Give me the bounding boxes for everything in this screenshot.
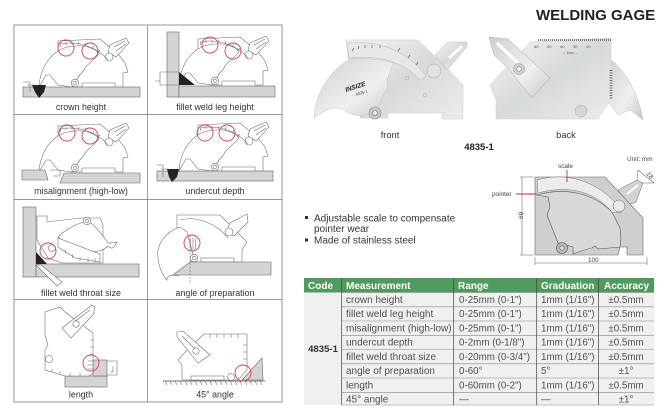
row: fillet weld leg height: fillet weld leg height — [346, 309, 433, 320]
label: front: front — [381, 130, 400, 140]
photo: gauge back — [489, 37, 643, 120]
row: 45 degree angle: — — [541, 394, 551, 406]
photo: gauge front: INSIZE — [344, 81, 367, 94]
photo: gauge front — [314, 40, 467, 119]
table header: Range — [458, 281, 489, 292]
panel: fillet weld leg height — [155, 32, 275, 112]
row: crown height: 1mm (1/16") — [541, 295, 595, 306]
panel: length: length — [69, 390, 93, 400]
table header: Measurement — [346, 281, 411, 292]
panel: misalignment (high-low): misalignment (high-low) — [34, 186, 128, 196]
row: angle of preparation — [346, 366, 633, 377]
row: undercut depth — [346, 338, 644, 348]
unit note: Unit: mm — [627, 156, 653, 163]
specification table — [304, 278, 654, 406]
row: crown height — [346, 295, 644, 306]
panel: misalignment (high-low) — [22, 123, 140, 196]
panel: undercut depth — [157, 122, 273, 196]
row: fillet weld throat size: 1mm (1/16") — [541, 352, 595, 363]
row: length: 1mm (1/16") — [541, 380, 595, 392]
row: fillet weld leg height: 1mm (1/16") — [541, 309, 595, 320]
row: fillet weld throat size — [346, 352, 644, 363]
row: fillet weld throat size: fillet weld throat size — [346, 352, 436, 363]
scale callout — [558, 163, 573, 182]
panel: angle of preparation — [158, 214, 271, 298]
row: undercut depth: 1mm (1/16") — [541, 338, 595, 348]
pointer callout: pointer — [492, 191, 512, 198]
row: fillet weld leg height — [346, 309, 644, 320]
row: 45 degree angle: — — [459, 394, 469, 406]
table header: Accuracy — [604, 281, 649, 292]
label: back: back — [556, 130, 576, 140]
photo: gauge front: 4835-1 — [355, 88, 369, 97]
row: misalignment — [346, 324, 644, 334]
table header — [304, 278, 654, 292]
panel: 45 degree angle: 45° angle — [196, 390, 234, 400]
photo: gauge back: 40 — [560, 44, 565, 49]
row: misalignment: misalignment (high-low) — [346, 324, 452, 334]
panel: crown height: crown height — [56, 102, 107, 112]
feature bullet list: Adjustable scale to compensate — [314, 214, 456, 224]
table header: Graduation — [541, 281, 594, 292]
dimension diagram: 18 — [644, 171, 655, 181]
row: fillet weld throat size: ±0.5mm — [608, 352, 644, 363]
photo: gauge back: 50 — [547, 44, 552, 49]
title: WELDING GAGE — [536, 7, 655, 24]
row: fillet weld throat size: 0-20mm (0-3/4") — [459, 352, 530, 363]
row: angle of preparation: 0-60° — [459, 366, 483, 377]
code cell: 4835-1 — [308, 344, 339, 355]
row: undercut depth: 0-2mm (0-1/8") — [459, 338, 525, 348]
row: length: ±0.5mm — [608, 380, 644, 392]
panel: crown height — [23, 38, 140, 112]
feature bullet list — [305, 214, 456, 246]
row: misalignment: ±0.5mm — [608, 324, 644, 334]
panel: fillet weld throat size: fillet weld throat size — [41, 288, 121, 298]
row: length — [346, 380, 644, 392]
photo: gauge back: 20 — [586, 44, 591, 49]
photo: gauge back: 30 — [573, 44, 578, 49]
row: crown height: crown height — [346, 295, 403, 306]
model number: 4835-1 — [464, 142, 495, 153]
feature bullet list: pointer wear — [314, 224, 370, 235]
row: undercut depth: ±0.5mm — [608, 338, 644, 348]
row: misalignment: 0-25mm (0-1") — [459, 324, 522, 334]
row: angle of preparation: ±1° — [619, 366, 633, 377]
scale callout: scale — [558, 163, 573, 170]
row: 45 degree angle — [346, 394, 633, 406]
panel: angle of preparation: angle of preparation — [176, 288, 255, 298]
row: crown height: 0-25mm (0-1") — [459, 295, 522, 306]
table header: Code — [308, 281, 333, 292]
photo: gauge back: ←1mm→ — [563, 51, 578, 55]
panel: length — [45, 305, 117, 400]
row: angle of preparation: angle of preparation — [346, 366, 435, 377]
dimension diagram: 69 — [518, 211, 525, 219]
dimension diagram — [492, 163, 655, 265]
panel: 45 degree angle — [163, 331, 265, 400]
photo: gauge back: 60 — [534, 44, 539, 49]
panel: fillet weld throat size — [23, 207, 139, 298]
row: 45 degree angle: ±1° — [619, 394, 633, 406]
row: crown height: ±0.5mm — [608, 295, 644, 306]
feature bullet list: Made of stainless steel — [314, 236, 416, 246]
row: fillet weld leg height: ±0.5mm — [608, 309, 644, 320]
row: length: 0-60mm (0-2") — [459, 380, 522, 392]
panel: usage diagrams grid — [14, 25, 282, 402]
row: length: length — [346, 380, 373, 392]
row: misalignment: 1mm (1/16") — [541, 324, 595, 334]
panel: undercut depth: undercut depth — [185, 186, 245, 196]
panel: fillet weld leg height: fillet weld leg height — [176, 102, 254, 112]
dimension diagram: 100 — [588, 257, 599, 264]
pointer callout — [492, 191, 537, 198]
row: angle of preparation: 5° — [541, 366, 550, 377]
row: fillet weld leg height: 0-25mm (0-1") — [459, 309, 522, 320]
row: undercut depth: undercut depth — [346, 338, 413, 348]
row: 45 degree angle: 45° angle — [346, 394, 389, 406]
